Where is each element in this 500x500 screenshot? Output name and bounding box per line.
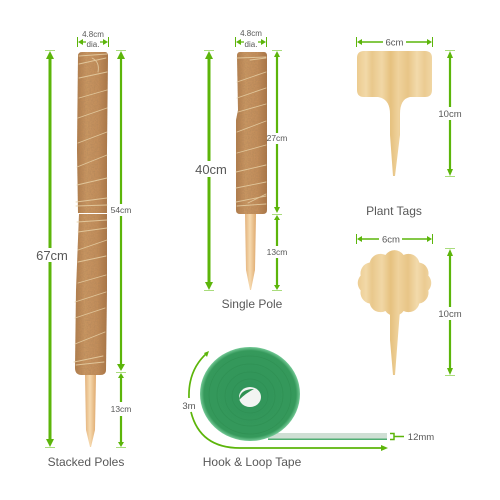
measure: tag height: 10cm [438,109,462,120]
measure: round tag width [356,234,432,246]
roll hole [239,387,261,407]
measure: round tag width: 6cm [382,234,400,246]
label: single pole: Single Pole [222,297,283,311]
measure: 27cm [267,50,287,214]
measure: 54cm: 54cm [111,205,131,215]
plant tag: scalloped [358,250,431,375]
measure: tag height [438,50,462,176]
measure: tape width 12mm: 12mm [408,432,434,443]
measure: 40cm [195,50,227,290]
label: hook and loop tape: Hook & Loop Tape [203,455,302,469]
label: plant tags: Plant Tags [366,204,422,218]
measure: stacked 13cm: 13cm [111,404,131,414]
measure: tape length 3m: 3m [182,401,196,412]
label: stacked poles: Stacked Poles [48,455,124,469]
plant tag: rectangular [357,51,432,176]
measure: 40cm: 40cm [195,162,227,177]
measure: round tag height: 10cm [438,309,462,320]
measure: 54cm [111,50,131,372]
measure: stacked diameter [78,30,108,49]
hook and loop tape [200,347,387,441]
measure: single diameter: 4.8cm [240,29,262,38]
measure: single 13cm: 13cm [267,247,287,257]
measure: tag width: 6cm [386,38,404,48]
measure: single 13cm [267,215,287,290]
tape roll [200,347,300,441]
measure: single diameter: dia. [245,40,257,49]
stacked pole [74,52,108,447]
measure: tape width 12mm [390,432,434,443]
measure: round tag height [438,248,462,376]
measure: 27cm: 27cm [267,133,287,143]
measure: tag width [356,37,432,48]
measure: 67cm: 67cm [36,248,68,263]
measure: 67cm [36,50,68,448]
single pole [236,52,267,290]
measure: stacked diameter: 4.8cm [82,30,104,39]
tape strip [268,433,387,440]
measure: tape length 3m [182,351,388,451]
measure: stacked 13cm [111,373,131,448]
measure: stacked diameter: dia. [87,40,99,49]
measure: single diameter [236,29,266,49]
